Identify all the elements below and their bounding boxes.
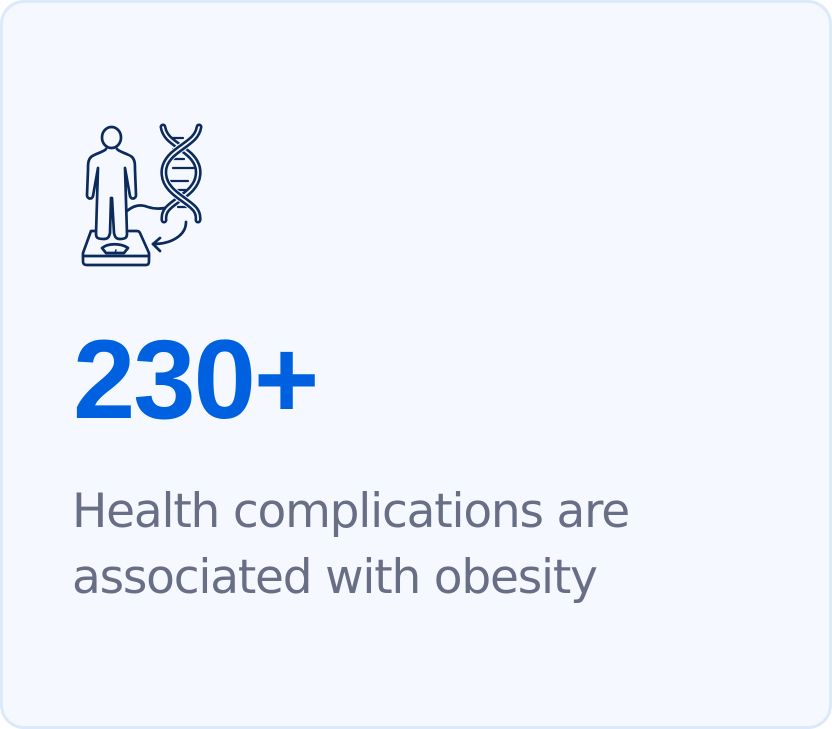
scale: [83, 231, 149, 265]
stat number: 230+: [73, 317, 317, 442]
description text: Health complications are: [72, 484, 629, 539]
DNA helix: [163, 127, 199, 220]
rungs: [170, 138, 194, 207]
description text: [72, 484, 629, 605]
person head: [102, 127, 121, 148]
person body: [87, 149, 136, 239]
strand two: [164, 127, 199, 220]
strand one: [163, 127, 198, 220]
connector from body to DNA: [127, 205, 165, 211]
arrow from DNA to scale: [153, 222, 186, 251]
description text: associated with obesity: [72, 550, 597, 605]
